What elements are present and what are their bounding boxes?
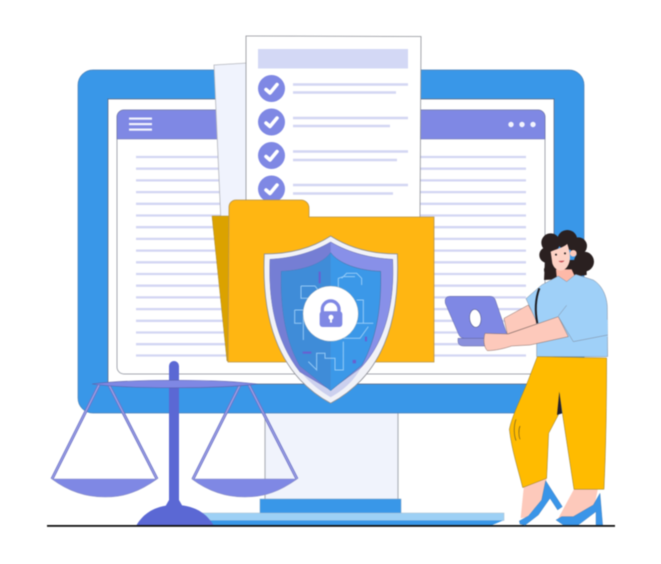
shield outer rim	[264, 236, 398, 403]
laptop	[445, 296, 508, 346]
person with laptop	[445, 230, 608, 525]
neck	[556, 269, 575, 283]
icon: menu	[129, 118, 152, 131]
folder back flap	[212, 216, 229, 361]
balance scale	[52, 361, 297, 526]
left leg	[521, 478, 547, 518]
icon: window dots	[508, 122, 536, 127]
right pan	[192, 479, 297, 497]
shield core shading	[281, 253, 331, 391]
browser window	[117, 110, 545, 374]
back arm	[504, 305, 538, 334]
shield blue core	[281, 253, 381, 391]
check marks	[266, 84, 277, 194]
hair	[539, 230, 594, 280]
folder front	[228, 200, 434, 362]
checklist document	[246, 36, 421, 220]
window header bar	[117, 110, 545, 139]
folder	[212, 200, 434, 362]
shield purple layer	[270, 242, 393, 390]
right shoe	[556, 493, 603, 525]
knee creases	[514, 419, 520, 441]
screen text lines	[136, 157, 526, 356]
scale base	[136, 505, 214, 526]
face	[551, 244, 570, 270]
monitor screen	[108, 99, 554, 384]
icon: padlock	[320, 301, 342, 327]
scale strings	[52, 385, 297, 479]
laptop logo	[469, 309, 482, 328]
trousers	[509, 357, 607, 489]
left shoe	[519, 481, 562, 525]
sleeve	[558, 305, 608, 342]
bag strap	[536, 288, 605, 339]
document title bar	[258, 49, 408, 68]
ground line	[47, 525, 615, 527]
shirt	[526, 274, 608, 357]
front arm and hand	[484, 317, 568, 351]
lock badge	[303, 286, 358, 341]
security shield	[264, 236, 398, 403]
trouser fold shadow	[557, 392, 562, 415]
check badges	[258, 75, 285, 202]
left pan	[52, 479, 157, 497]
circuit accents	[303, 272, 367, 363]
monitor frame	[78, 70, 584, 413]
back document	[214, 63, 247, 360]
right leg	[558, 487, 598, 519]
shield lower band	[300, 367, 361, 397]
scale pole	[165, 361, 183, 507]
face details	[555, 252, 566, 262]
scale beam	[92, 380, 257, 388]
ear	[570, 250, 577, 257]
shield purple shading	[270, 242, 331, 390]
monitor stand	[200, 411, 504, 526]
scale string highlights	[52, 385, 297, 479]
checklist row lines	[293, 84, 408, 194]
sleeve edge	[558, 305, 608, 342]
circuit lines	[295, 273, 373, 370]
